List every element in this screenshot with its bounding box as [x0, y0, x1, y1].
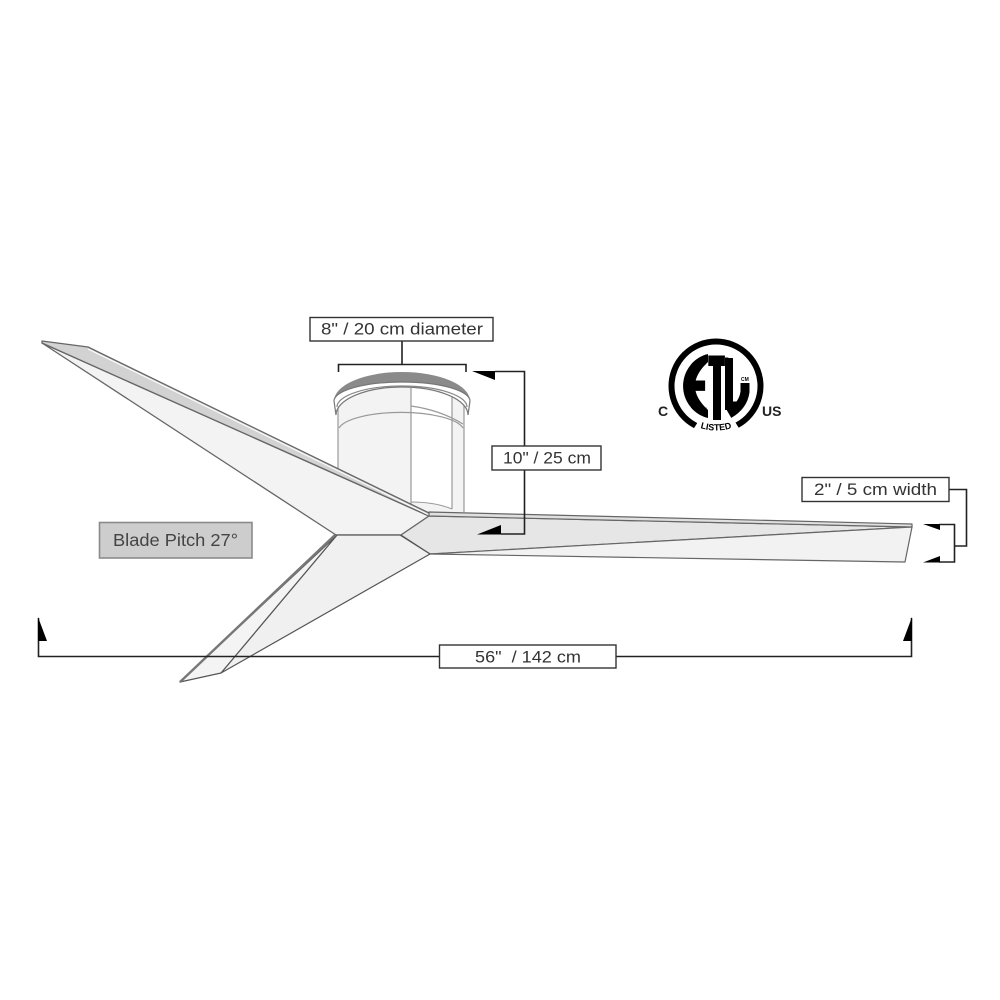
span label: 56" / 142 cm [475, 648, 581, 666]
right fan blade [401, 512, 912, 562]
fan motor housing [334, 372, 470, 512]
blade pitch label [100, 522, 252, 558]
housing cap [334, 372, 470, 415]
diameter label [310, 318, 493, 341]
ETL listed logo: C [658, 403, 668, 419]
ceiling fan dimension diagram [38, 316, 968, 683]
ETL listed logo [658, 335, 781, 440]
lower left fan blade [180, 535, 430, 682]
height label: 10" / 25 cm [503, 448, 591, 468]
width label: 2" / 5 cm width [814, 480, 937, 499]
diameter dimension [310, 318, 493, 372]
width label [802, 478, 949, 502]
blade width dimension [802, 478, 966, 562]
diameter label: 8" / 20 cm diameter [321, 320, 483, 338]
overall span dimension [38, 617, 912, 668]
ETL listed logo: CM [741, 377, 749, 383]
ETL listed logo: LISTED [700, 422, 731, 430]
ETL listed logo: E [689, 334, 708, 438]
ETL listed logo: US [762, 403, 781, 419]
upper left fan blade [42, 341, 429, 535]
ETL listed logo: T [708, 335, 725, 440]
ETL listed logo: L [724, 341, 737, 426]
blade pitch label: Blade Pitch 27° [113, 530, 238, 550]
height label [492, 446, 601, 470]
span label [440, 645, 616, 668]
height dimension [472, 371, 601, 534]
